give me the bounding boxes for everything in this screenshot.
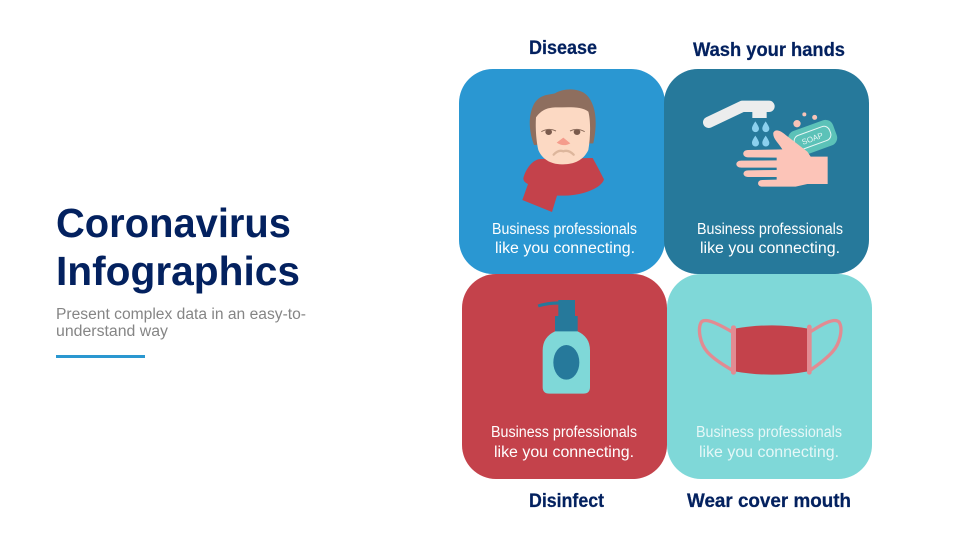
panel: wear cover mouth [667, 274, 872, 479]
subtitle [56, 306, 306, 340]
subtitle: understand way [56, 323, 168, 340]
icon: face mask [699, 320, 841, 375]
caption [491, 424, 637, 461]
panel: disinfect [462, 274, 667, 479]
caption: like you connecting. [700, 240, 840, 257]
icon: tap, soap and hand: SOAP [801, 131, 824, 147]
heading: disinfect: Disinfect [529, 491, 605, 512]
heading: wash your hands: Wash your hands [693, 40, 845, 61]
icon: sick person with scarf [522, 89, 604, 212]
icon: pump bottle [538, 300, 590, 394]
caption: like you connecting. [494, 444, 634, 461]
caption: Business professionals [696, 424, 842, 441]
heading: wear cover mouth: Wear cover mouth [687, 491, 851, 512]
caption [697, 221, 843, 257]
caption: Business professionals [491, 424, 637, 441]
panel: wash your hands [664, 69, 869, 274]
title: Infographics [56, 248, 300, 294]
title: Coronavirus [56, 200, 291, 246]
subtitle: Present complex data in an easy-to- [56, 306, 306, 323]
title [56, 200, 300, 294]
caption: Business professionals [492, 221, 637, 238]
caption: like you connecting. [699, 444, 839, 461]
caption: like you connecting. [495, 240, 635, 257]
accent rule [56, 355, 145, 358]
caption [696, 424, 842, 461]
icon: tap, soap and hand [709, 106, 839, 187]
panel: disease [459, 69, 665, 274]
heading: disease: Disease [529, 38, 597, 59]
caption [492, 221, 637, 257]
caption: Business professionals [697, 221, 843, 238]
